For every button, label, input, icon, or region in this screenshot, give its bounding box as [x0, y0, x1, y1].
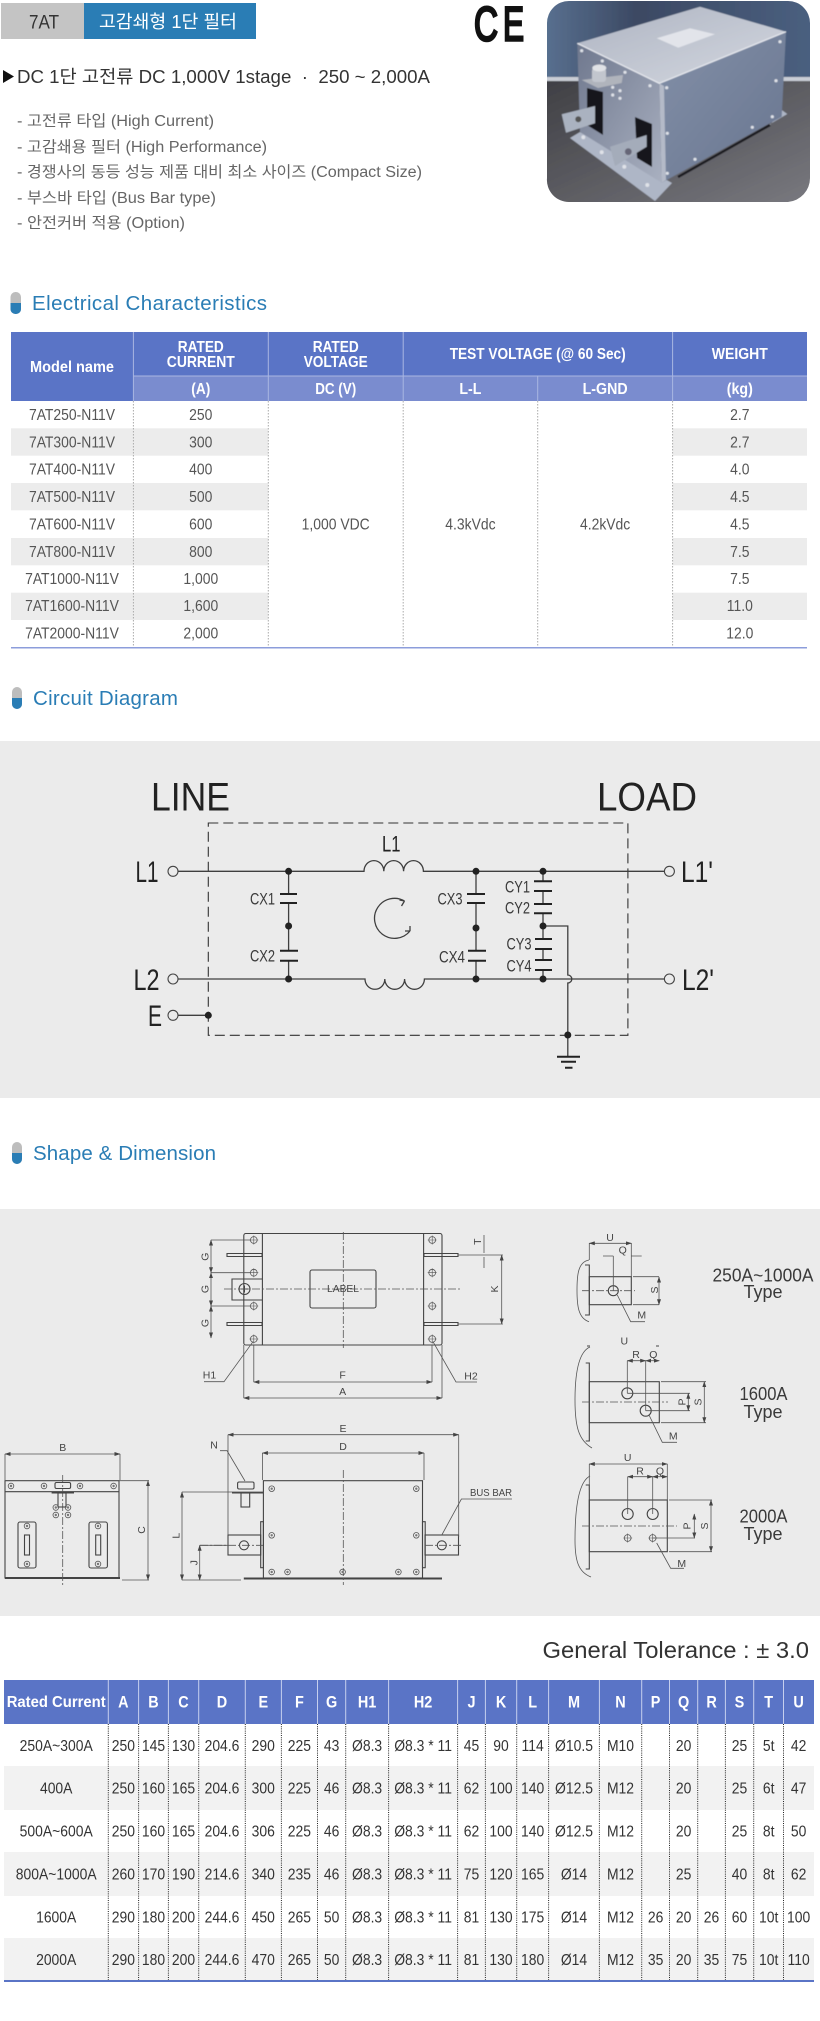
model name column: 7AT1000-N11V	[25, 570, 119, 588]
model name column: 7AT800-N11V	[29, 543, 115, 561]
rated current column: 300	[189, 434, 212, 452]
row: 500A~600A: 160	[142, 1823, 165, 1841]
weight column	[726, 406, 753, 643]
weight column: 4.0	[730, 461, 749, 479]
row: 400A: 250	[112, 1780, 135, 1798]
LINE and LOAD labels: LOAD	[597, 776, 697, 820]
table header: J	[467, 1693, 476, 1712]
heading: Electrical Characteristics: Electrical Characteristics	[32, 292, 267, 315]
drawing: 250A~1000A bus bar: 250A~1000A	[712, 1266, 814, 1286]
heading: Circuit Diagram: Circuit Diagram	[33, 687, 178, 710]
row: 2000A: 244.6	[205, 1951, 239, 1969]
row: 500A~600A: 250	[112, 1823, 135, 1841]
row: 1600A: 26	[704, 1909, 719, 1927]
drawing: top view: H2	[464, 1370, 478, 1382]
row: 800A~1000A: 214.6	[205, 1866, 239, 1884]
row: 400A	[40, 1780, 806, 1798]
row: 400A: Ø12.5	[555, 1780, 593, 1798]
row: 800A~1000A: 800A~1000A	[16, 1866, 97, 1884]
capacitor labels: CX1	[250, 890, 275, 908]
table header: H1	[358, 1693, 377, 1712]
table header: K	[496, 1693, 507, 1712]
LINE and LOAD labels: LINE	[151, 776, 230, 820]
row: 1600A: 265	[288, 1909, 311, 1927]
drawing: 2000A bus bar: U	[624, 1452, 631, 1464]
row: 2000A: M12	[607, 1951, 634, 1969]
capacitor labels: CY3	[506, 934, 532, 954]
row: 2000A: 470	[252, 1951, 275, 1969]
model name column: 7AT500-N11V	[29, 488, 115, 506]
drawing: 250A~1000A bus bar: Q	[619, 1245, 627, 1257]
row: 250A~300A: 43	[324, 1737, 339, 1755]
table header: N	[615, 1693, 626, 1712]
row: 800A~1000A	[16, 1866, 806, 1884]
drawing: 250A~1000A bus bar: S	[649, 1286, 661, 1294]
table header: DC (V)	[315, 381, 356, 398]
rated current column: 800	[189, 543, 212, 561]
feature list: - 안전커버 적용 (Option)	[17, 214, 185, 232]
model name column: 7AT300-N11V	[29, 434, 115, 452]
table header: R	[706, 1693, 717, 1712]
rated current column: 600	[189, 516, 212, 534]
drawing: 250A~1000A bus bar	[577, 1232, 814, 1322]
dashed enclosure	[208, 823, 628, 1035]
table header: D	[217, 1693, 227, 1712]
drawing: 250A~1000A bus bar: Type	[743, 1282, 783, 1302]
drawing: top view	[200, 1232, 503, 1398]
row: 2000A: 130	[489, 1951, 513, 1969]
capacitor plates	[280, 881, 580, 1068]
rated current column: 500	[189, 488, 212, 506]
rated current column	[183, 406, 218, 643]
row: 400A: 6t	[763, 1780, 775, 1798]
drawing: top view: A	[339, 1386, 346, 1398]
row: 2000A: 35	[704, 1951, 719, 1969]
row: 400A: 400A	[40, 1780, 72, 1798]
capacitor labels: CY4	[506, 956, 532, 976]
row: 250A~300A: 42	[791, 1737, 806, 1755]
tag: product title	[84, 3, 256, 39]
panel: circuit diagram	[0, 741, 820, 1098]
row: 250A~300A: 130	[172, 1737, 195, 1755]
row: 400A: 140	[521, 1780, 544, 1798]
LINE and LOAD labels	[151, 776, 697, 820]
row: 1600A: 50	[324, 1909, 339, 1927]
table header: Model name	[30, 359, 114, 376]
heading: Shape & Dimension: Shape & Dimension	[33, 1142, 216, 1165]
table header: VOLTAGE	[304, 354, 368, 371]
row: 500A~600A: 100	[489, 1823, 513, 1841]
row: 800A~1000A: 8t	[763, 1866, 775, 1884]
row: 250A~300A: 25	[732, 1737, 747, 1755]
row: 1600A: 60	[732, 1909, 747, 1927]
rated current column: 400	[189, 461, 212, 479]
merged voltage cells	[302, 516, 631, 534]
row: 250A~300A: 90	[493, 1737, 509, 1755]
row: 250A~300A: Ø8.3 * 11	[394, 1737, 452, 1755]
row: 1600A: Ø14	[561, 1909, 587, 1927]
icon: CE mark	[474, 0, 524, 52]
capacitor labels: CY2	[505, 898, 530, 918]
row: 400A: 46	[324, 1780, 339, 1798]
row: 400A: 165	[172, 1780, 195, 1798]
row: 2000A: 180	[142, 1951, 165, 1969]
model name column: 7AT250-N11V	[29, 406, 115, 424]
table header: M	[568, 1693, 580, 1712]
table header: S	[735, 1693, 744, 1712]
drawing: 2000A bus bar: Type	[743, 1524, 783, 1544]
capacitor labels: CX2	[250, 946, 275, 966]
drawing: top view: F	[339, 1370, 346, 1382]
table header: Q	[678, 1693, 689, 1712]
feature list	[17, 112, 422, 232]
table header	[4, 1680, 814, 1724]
row: 500A~600A: 225	[288, 1823, 311, 1841]
row: 2000A: 75	[732, 1951, 747, 1969]
row: 2000A: 2000A	[36, 1951, 76, 1969]
row: 500A~600A: 165	[172, 1823, 195, 1841]
row: 250A~300A: 225	[288, 1737, 311, 1755]
feature list: - 경쟁사의 동등 성능 제품 대비 최소 사이즈 (Compact Size)	[17, 163, 422, 181]
row: 250A~300A: 145	[142, 1737, 165, 1755]
drawing: 1600A bus bar: U	[621, 1336, 628, 1348]
row: 400A: Ø8.3 * 11	[394, 1780, 452, 1798]
row: 2000A: 290	[112, 1951, 135, 1969]
drawing: side view: D	[339, 1441, 347, 1453]
row: 800A~1000A: M12	[607, 1866, 634, 1884]
table header: P	[651, 1693, 660, 1712]
row: 1600A: 450	[252, 1909, 275, 1927]
row: 800A~1000A: 260	[112, 1866, 135, 1884]
row stripes	[11, 428, 807, 620]
drawing: 2000A bus bar: 2000A	[740, 1506, 788, 1526]
row: 500A~600A: 306	[252, 1823, 275, 1841]
feature list: - 고전류 타입 (High Current)	[17, 112, 214, 130]
merged voltage cells: 4.3kVdc	[445, 516, 496, 534]
row: 800A~1000A: 120	[489, 1866, 513, 1884]
row: 1600A: 10t	[759, 1909, 779, 1927]
row: 800A~1000A: 340	[252, 1866, 275, 1884]
feature list: - 부스바 타입 (Bus Bar type)	[17, 189, 216, 207]
drawing: 1600A bus bar: P	[676, 1398, 688, 1406]
row: 500A~600A: 50	[791, 1823, 806, 1841]
row: 250A~300A: 290	[252, 1737, 275, 1755]
table header: B	[148, 1693, 159, 1712]
table header: E	[258, 1693, 268, 1712]
drawing: top view: G	[200, 1253, 212, 1261]
product photo	[540, 0, 815, 206]
row: 400A: Ø8.3	[352, 1780, 382, 1798]
row: 400A: 62	[464, 1780, 479, 1798]
table header: C	[178, 1693, 189, 1712]
row: 250A~300A: Ø8.3	[352, 1737, 382, 1755]
panel: shape and dimension drawings	[0, 1209, 820, 1616]
model name column: 7AT2000-N11V	[25, 625, 119, 643]
rated current column: 2,000	[183, 625, 218, 643]
weight column: 7.5	[730, 543, 749, 561]
tag: series 7AT	[1, 3, 84, 39]
weight column: 7.5	[730, 570, 749, 588]
row: 500A~600A: 46	[324, 1823, 339, 1841]
row: 800A~1000A: Ø14	[561, 1866, 587, 1884]
row: 250A~300A: Ø10.5	[555, 1737, 593, 1755]
row: 1600A: 81	[464, 1909, 479, 1927]
terminal labels: E	[148, 1000, 162, 1033]
terminal labels: L1	[136, 856, 158, 889]
icon: CE mark: E	[503, 0, 524, 52]
model name column: 7AT1600-N11V	[25, 597, 119, 615]
row: 400A: 204.6	[205, 1780, 239, 1798]
table header: CURRENT	[167, 354, 235, 371]
row: 250A~300A: M10	[607, 1737, 634, 1755]
row stripes	[4, 1766, 814, 1980]
row: 500A~600A: 20	[676, 1823, 691, 1841]
drawing: 1600A bus bar: Type	[743, 1402, 783, 1422]
row: 2000A: Ø14	[561, 1951, 587, 1969]
row: 2000A: 200	[172, 1951, 195, 1969]
row: 400A: 20	[676, 1780, 691, 1798]
drawing: 2000A bus bar: S	[699, 1522, 711, 1530]
lead line: DC rating: DC 1단 고전류 DC 1,000V 1stage · 250 ~ 2,000A	[17, 67, 430, 87]
model name column: 7AT400-N11V	[29, 461, 115, 479]
table header: T	[764, 1693, 773, 1712]
drawing: top view: LABEL	[327, 1283, 359, 1295]
drawing: 1600A bus bar: Q	[649, 1349, 657, 1361]
rated current column: 1,600	[183, 597, 218, 615]
capacitor labels: CX4	[439, 948, 465, 966]
table header: TEST VOLTAGE (@ 60 Sec)	[450, 346, 626, 363]
table header: L-L	[459, 381, 481, 398]
row: 500A~600A: 62	[464, 1823, 479, 1841]
row: 800A~1000A: Ø8.3	[352, 1866, 382, 1884]
table: dimensions	[4, 1680, 814, 1982]
drawing: 1600A bus bar: R	[632, 1349, 640, 1361]
row: 2000A: Ø8.3	[352, 1951, 382, 1969]
drawing: 250A~1000A bus bar: U	[606, 1232, 614, 1244]
weight column: 2.7	[730, 434, 749, 452]
terminal labels: L1'	[681, 856, 713, 889]
drawing: 2000A bus bar: R	[636, 1466, 644, 1478]
row: 1600A: 244.6	[205, 1909, 239, 1927]
row: 250A~300A: 250A~300A	[20, 1737, 93, 1755]
drawing: side view: N	[210, 1440, 218, 1452]
row: 500A~600A: Ø8.3	[352, 1823, 382, 1841]
weight column: 4.5	[730, 488, 749, 506]
junction dots	[205, 868, 571, 1038]
drawing: side view: J	[188, 1560, 200, 1565]
row: 1600A: 130	[489, 1909, 513, 1927]
row: 400A: 47	[791, 1780, 806, 1798]
capacitor labels	[250, 878, 532, 976]
table header: H2	[414, 1693, 433, 1712]
row: 400A: M12	[607, 1780, 634, 1798]
capacitor labels: CX3	[438, 890, 462, 908]
drawing: 2000A bus bar: Q	[656, 1466, 664, 1478]
table header: L	[528, 1693, 537, 1712]
terminal labels: L2	[134, 964, 160, 997]
row: 500A~600A: 8t	[763, 1823, 775, 1841]
weight column: 2.7	[730, 406, 749, 424]
drawing: side view	[171, 1423, 512, 1585]
drawing: front view: B	[59, 1442, 66, 1454]
drawing: 2000A bus bar	[575, 1452, 788, 1577]
row: 1600A	[36, 1909, 810, 1927]
row: 800A~1000A: 25	[676, 1866, 691, 1884]
row: 1600A: 175	[521, 1909, 544, 1927]
row: 500A~600A: M12	[607, 1823, 634, 1841]
row: 1600A: 290	[112, 1909, 135, 1927]
table header: G	[326, 1693, 337, 1712]
row: 2000A: 10t	[759, 1951, 779, 1969]
row: 2000A: 265	[288, 1951, 311, 1969]
row: 1600A: 26	[648, 1909, 663, 1927]
table header: F	[295, 1693, 304, 1712]
row: 500A~600A	[20, 1823, 806, 1841]
drawing: front view: C	[136, 1526, 148, 1534]
drawing: top view: H1	[203, 1370, 216, 1382]
row: 1600A: Ø8.3	[352, 1909, 382, 1927]
row: 2000A: 35	[648, 1951, 663, 1969]
row: 800A~1000A: 235	[288, 1866, 311, 1884]
table header: RATED	[313, 339, 359, 356]
table header: (A)	[191, 381, 210, 398]
row: 1600A: 100	[787, 1909, 810, 1927]
row: 400A: 160	[142, 1780, 165, 1798]
row: 2000A: 81	[464, 1951, 479, 1969]
row: 2000A: 110	[788, 1951, 810, 1969]
row: 250A~300A: 20	[676, 1737, 691, 1755]
row: 1600A: 20	[676, 1909, 691, 1927]
capacitor labels: CY1	[505, 878, 530, 896]
row: 2000A: 20	[676, 1951, 691, 1969]
row: 800A~1000A: 46	[324, 1866, 339, 1884]
row: 800A~1000A: 75	[464, 1866, 479, 1884]
row: 800A~1000A: 170	[142, 1866, 165, 1884]
terminal labels: L1	[382, 832, 400, 856]
row: 250A~300A: 5t	[763, 1737, 775, 1755]
row: 1600A: 1600A	[36, 1909, 76, 1927]
row: 800A~1000A: 62	[791, 1866, 806, 1884]
drawing: top view: K	[489, 1285, 501, 1293]
merged voltage cells: 1,000 VDC	[302, 516, 370, 534]
merged voltage cells: 4.2kVdc	[580, 516, 631, 534]
row: 400A: 25	[732, 1780, 747, 1798]
row: 250A~300A: 45	[464, 1737, 479, 1755]
row: 2000A: 50	[324, 1951, 339, 1969]
row: 1600A: 180	[142, 1909, 165, 1927]
row: 250A~300A: 204.6	[205, 1737, 239, 1755]
row: 1600A: M12	[607, 1909, 634, 1927]
row: 250A~300A: 114	[522, 1737, 544, 1755]
drawing: 2000A bus bar: P	[682, 1522, 694, 1530]
drawing: top view: G	[200, 1285, 212, 1293]
row: 400A: 300	[252, 1780, 275, 1798]
table header: L-GND	[583, 381, 628, 398]
drawing: side view: E	[339, 1423, 347, 1435]
drawing: top view: T	[472, 1238, 484, 1245]
rated current column: 250	[189, 406, 212, 424]
terminal labels	[134, 832, 714, 1033]
weight column: 12.0	[726, 625, 753, 643]
model name column	[25, 406, 119, 643]
table header: (kg)	[727, 381, 753, 398]
drawing: 1600A bus bar	[575, 1336, 788, 1448]
row: 500A~600A: 140	[521, 1823, 544, 1841]
row: 1600A: 200	[172, 1909, 195, 1927]
drawing: top view: G	[200, 1319, 212, 1327]
drawing: side view: L	[171, 1533, 183, 1539]
drawing: front view	[5, 1442, 149, 1585]
row: 1600A: Ø8.3 * 11	[394, 1909, 452, 1927]
row: 500A~600A: Ø8.3 * 11	[394, 1823, 452, 1841]
row: 500A~600A: 204.6	[205, 1823, 239, 1841]
row: 2000A: Ø8.3 * 11	[394, 1951, 452, 1969]
table header: A	[118, 1693, 129, 1712]
row: 800A~1000A: 190	[172, 1866, 195, 1884]
icon: CE mark: C	[474, 0, 498, 52]
row: 800A~1000A: Ø8.3 * 11	[394, 1866, 452, 1884]
row: 400A: 225	[288, 1780, 311, 1798]
drawing: 1600A bus bar: 1600A	[740, 1384, 788, 1404]
feature list: - 고감쇄용 필터 (High Performance)	[17, 138, 267, 156]
wires and coils	[178, 861, 664, 1057]
terminal labels: L2'	[682, 964, 714, 997]
general tolerance note: General Tolerance : ± 3.0	[542, 1637, 809, 1663]
row: 500A~600A: Ø12.5	[555, 1823, 593, 1841]
weight column: 11.0	[727, 597, 753, 615]
row: 250A~300A	[20, 1737, 806, 1755]
drawing: 1600A bus bar: S	[692, 1398, 704, 1406]
tag: series 7AT: 7AT	[29, 12, 59, 34]
row: 2000A: 180	[521, 1951, 544, 1969]
table header: Rated Current	[7, 1694, 106, 1711]
row: 500A~600A: 25	[732, 1823, 747, 1841]
table header: RATED	[178, 339, 224, 356]
weight column: 4.5	[730, 516, 749, 534]
drawing: 2000A bus bar: M	[677, 1558, 686, 1570]
table: electrical characteristics	[11, 332, 807, 648]
row: 250A~300A: 250	[112, 1737, 135, 1755]
drawing: 250A~1000A bus bar: M	[637, 1310, 646, 1322]
terminals	[168, 866, 674, 1020]
rated current column: 1,000	[183, 570, 218, 588]
row: 800A~1000A: 40	[732, 1866, 747, 1884]
row: 800A~1000A: 165	[521, 1866, 544, 1884]
row: 400A: 100	[489, 1780, 513, 1798]
drawing: 1600A bus bar: M	[669, 1431, 678, 1443]
table header: WEIGHT	[712, 346, 768, 363]
table header	[11, 332, 807, 401]
drawing: side view: BUS BAR	[470, 1487, 512, 1499]
row: 2000A	[36, 1951, 810, 1969]
table header: U	[793, 1693, 804, 1712]
row: 500A~600A: 500A~600A	[20, 1823, 93, 1841]
tag: product title: 고감쇄형 1단 필터	[99, 12, 237, 32]
model name column: 7AT600-N11V	[29, 516, 115, 534]
